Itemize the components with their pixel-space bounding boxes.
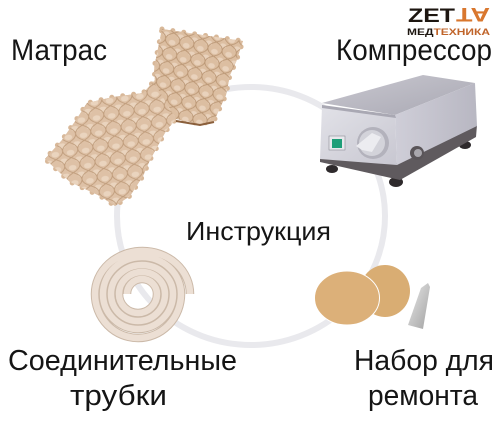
tube coil <box>95 251 190 338</box>
glue tube <box>408 283 430 329</box>
mattress label: Матрас <box>11 34 107 67</box>
repair kit label second line: ремонта <box>368 380 479 412</box>
center label: Инструкция <box>186 216 331 246</box>
panel: tubes <box>8 251 237 412</box>
compressor device <box>320 75 477 187</box>
tubes label: Соединительные <box>8 345 237 377</box>
tubes label second line: трубки <box>70 380 167 412</box>
logo flipped letters: AT <box>456 3 490 25</box>
air outlet <box>410 146 424 160</box>
panel: repair kit <box>314 265 494 412</box>
repair kit label: Набор для <box>354 345 494 377</box>
panel: mattress <box>11 25 250 210</box>
mattress image <box>40 25 250 210</box>
logo word: ZET <box>408 5 455 27</box>
central ring <box>117 87 385 345</box>
control knob <box>356 127 389 159</box>
repair patches <box>314 265 410 325</box>
panel: compressor <box>320 34 492 187</box>
power switch <box>329 136 345 150</box>
logo: Zetta Medtehnika <box>407 3 490 38</box>
compressor label: Компрессор <box>336 34 492 67</box>
logo subtitle: МЕД ТЕХНИКА <box>407 27 490 38</box>
